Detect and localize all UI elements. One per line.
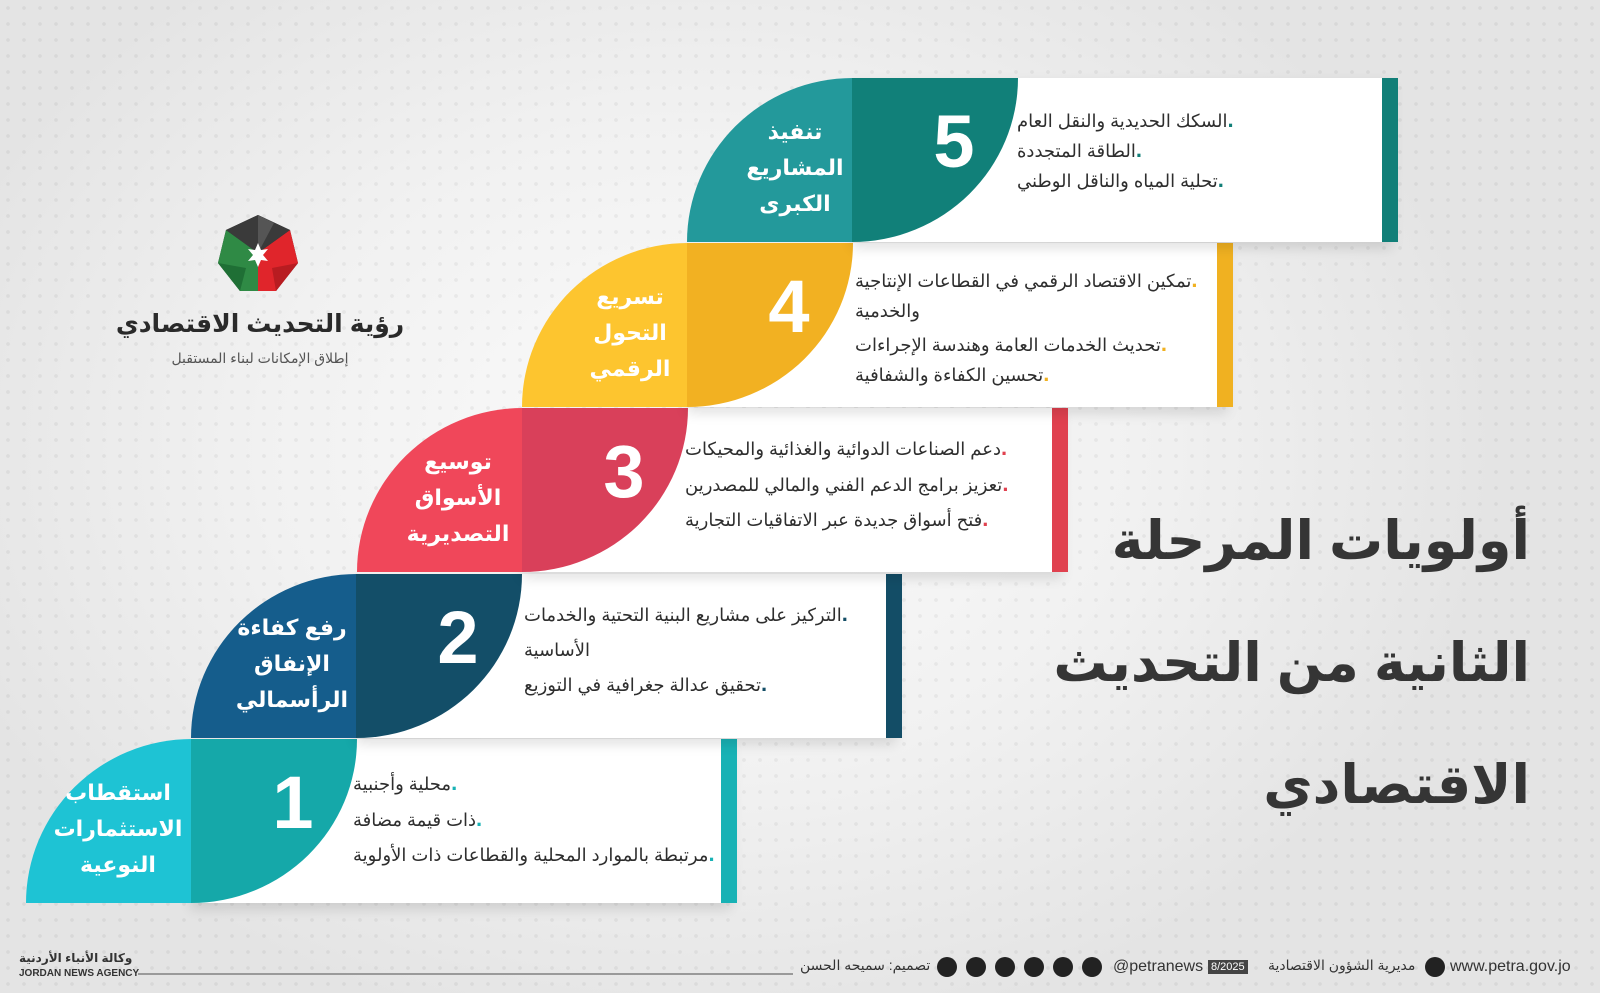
footer	[19, 950, 1571, 979]
bullets 5: .الطاقة المتجددة	[1017, 137, 1142, 162]
main title: الثانية من التحديث	[1053, 633, 1530, 693]
leaf 5 title	[687, 78, 853, 242]
bullets 4: .تحديث الخدمات العامة وهندسة الإجراءات	[855, 331, 1167, 356]
leaf 1 title	[26, 739, 192, 903]
number block 1: 1	[272, 761, 314, 844]
bullets 3: .دعم الصناعات الدوائية والغذائية والمحيكات	[685, 435, 1007, 460]
leaf 3 title: توسيع	[424, 449, 492, 474]
footer credits and social: @petranews	[1113, 958, 1203, 975]
bullets 2	[524, 601, 848, 696]
bar 5	[1382, 78, 1398, 242]
leaf 1 title: الاستثمارات	[54, 816, 182, 841]
bullets 1	[353, 770, 715, 866]
number block 4	[687, 243, 853, 407]
bullets 3: .فتح أسواق جديدة عبر الاتفاقيات التجارية	[685, 506, 988, 531]
bullets 4: .تمكين الاقتصاد الرقمي في القطاعات الإنتاجية	[855, 267, 1197, 292]
bar 3	[1052, 408, 1068, 572]
step 2	[191, 574, 902, 748]
card 4	[687, 243, 1227, 407]
footer credits and social	[800, 957, 1571, 977]
footer credits and social: 8/2025	[1211, 961, 1245, 973]
bar 2	[886, 574, 902, 738]
bullets 3	[685, 435, 1008, 531]
step 5	[687, 78, 1398, 252]
step 1	[26, 739, 737, 912]
leaf 2 title: الرأسمالي	[236, 687, 348, 712]
card 2	[356, 574, 896, 738]
bullets 2: .تحقيق عدالة جغرافية في التوزيع	[524, 671, 767, 696]
bullets 3: .تعزيز برامج الدعم الفني والمالي للمصدرين	[685, 471, 1008, 496]
leaf 4 title: الرقمي	[590, 356, 670, 381]
bullets 1: .مرتبطة بالموارد المحلية والقطاعات ذات الأولوية	[353, 841, 715, 866]
bullets 1: .محلية وأجنبية	[353, 770, 457, 795]
footer agency	[19, 950, 139, 979]
card 1	[191, 739, 731, 903]
leaf 5 title: المشاريع	[746, 155, 844, 180]
bullets 5: .السكك الحديدية والنقل العام	[1017, 107, 1234, 132]
leaf 3 title: التصديرية	[407, 521, 509, 546]
bullets 5: .تحلية المياه والناقل الوطني	[1017, 167, 1224, 192]
number block 3	[522, 408, 688, 572]
card 3	[522, 408, 1062, 572]
bullets 4: .تحسين الكفاءة والشفافية	[855, 361, 1049, 386]
logo title: رؤية التحديث الاقتصادي	[116, 310, 404, 338]
bullets 2: الأساسية	[524, 640, 590, 660]
logo	[116, 215, 404, 366]
number block 5: 5	[933, 100, 975, 183]
main title: أولويات المرحلة	[1112, 511, 1530, 571]
footer credits and social: www.petra.gov.jo	[1450, 958, 1571, 975]
leaf 2 title	[191, 574, 357, 738]
bar 1	[721, 739, 737, 903]
number block 4: 4	[768, 265, 810, 348]
leaf 5 title: الكبرى	[759, 191, 831, 216]
leaf 4 title: التحول	[593, 320, 667, 345]
main title	[1053, 506, 1530, 816]
bullets 4	[855, 267, 1197, 386]
number block 1	[191, 739, 357, 903]
footer credits and social: تصميم: سميحه الحسن	[800, 957, 930, 973]
bullets 2: .التركيز على مشاريع البنية التحتية والخدمات	[524, 601, 848, 626]
bullets 4: والخدمية	[855, 301, 920, 321]
footer agency: JORDAN NEWS AGENCY	[19, 968, 139, 979]
footer agency: وكالة الأنباء الأردنية	[19, 951, 132, 965]
leaf 1 title: النوعية	[80, 852, 156, 877]
bar 4	[1217, 243, 1233, 407]
bullets 5	[1017, 107, 1234, 192]
leaf 3 title	[357, 408, 523, 572]
number block 2	[356, 574, 522, 738]
leaf 2 title: رفع كفاءة	[237, 615, 347, 640]
icon: logo heptagon	[218, 215, 298, 291]
number block 3: 3	[603, 430, 645, 513]
number block 2: 2	[437, 596, 479, 679]
logo subtitle: إطلاق الإمكانات لبناء المستقبل	[171, 350, 349, 366]
card 5	[852, 78, 1392, 242]
leaf 2 title: الإنفاق	[254, 651, 330, 676]
step 3	[357, 408, 1068, 582]
leaf 1 title: استقطاب	[65, 780, 171, 805]
step 4	[522, 243, 1233, 416]
leaf 4 title	[522, 243, 688, 407]
footer credits and social: مديرية الشؤون الاقتصادية	[1268, 957, 1415, 973]
leaf 4 title: تسريع	[596, 284, 664, 309]
bullets 1: .ذات قيمة مضافة	[353, 806, 482, 831]
main title: الاقتصادي	[1263, 755, 1530, 815]
leaf 3 title: الأسواق	[415, 485, 501, 510]
number block 5	[852, 78, 1018, 242]
leaf 5 title: تنفيذ	[768, 119, 822, 144]
